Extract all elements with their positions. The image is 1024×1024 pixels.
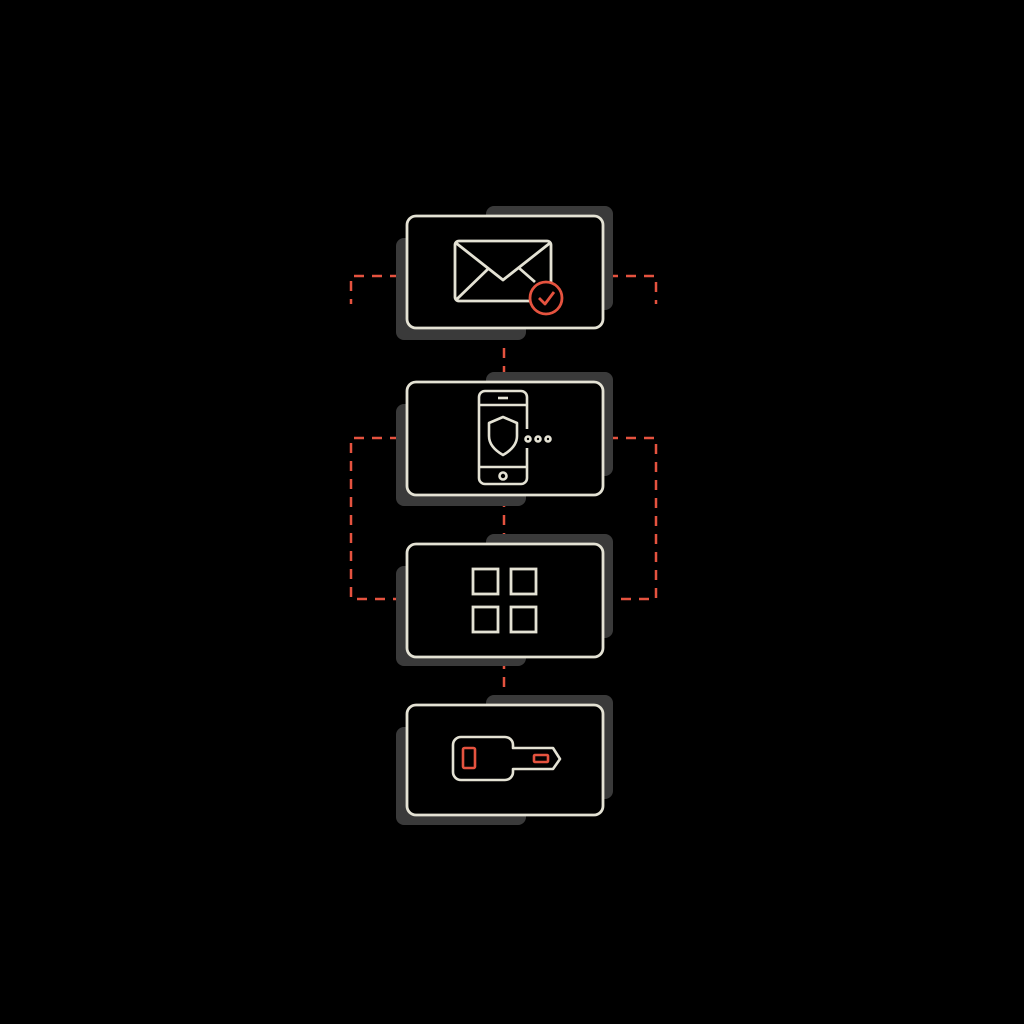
card 4: key — [396, 695, 613, 825]
icon: phone with shield — [479, 391, 550, 484]
card 2: phone shield — [396, 372, 613, 506]
card 1: email — [396, 206, 613, 340]
icon: car key — [453, 737, 560, 780]
icon: envelope with check — [455, 241, 562, 314]
card 3: grid — [396, 534, 613, 666]
dashed connectors — [351, 276, 656, 703]
icon: four squares — [473, 569, 536, 632]
